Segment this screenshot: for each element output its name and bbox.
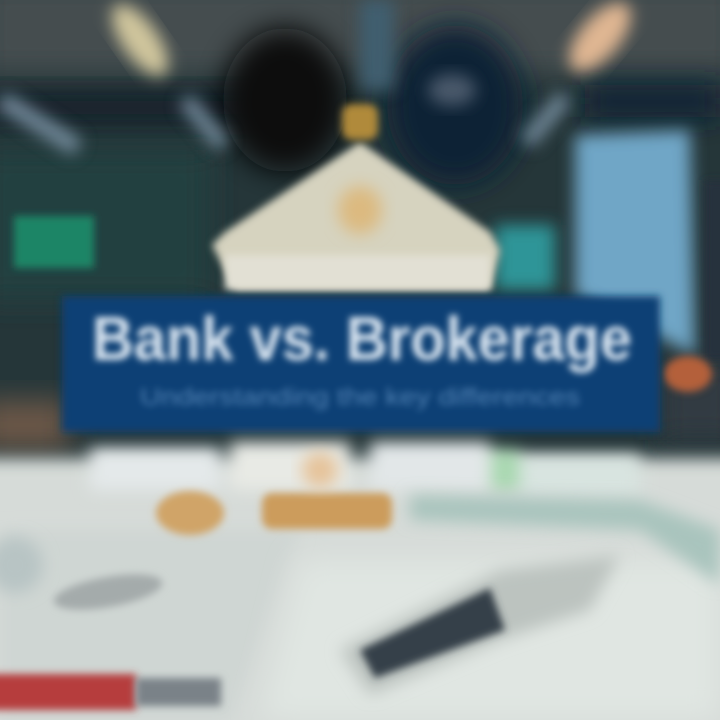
ceiling light: right <box>558 0 642 82</box>
shadow left grey <box>0 537 43 593</box>
orange top accent <box>302 452 338 488</box>
strip of small documents <box>90 442 640 495</box>
red bar: bottom left <box>0 674 136 710</box>
dome highlight <box>428 74 476 106</box>
icon: bank building roof <box>212 104 500 290</box>
green sign <box>14 216 94 268</box>
orange label: right <box>262 493 392 529</box>
window: right side blue <box>575 130 695 355</box>
chart paper: right, green tint <box>410 495 720 585</box>
orange object right of banner <box>664 356 712 392</box>
shadow oval on paper <box>51 568 165 616</box>
dark column at right edge <box>704 180 720 360</box>
ceiling light: left <box>101 0 179 85</box>
desk surface <box>0 458 720 720</box>
subheading: Understanding the key differences <box>140 384 580 411</box>
heading: Bank vs. Brokerage <box>92 305 632 374</box>
teal column <box>495 225 555 290</box>
banner: title panel <box>62 296 660 432</box>
grey bar: bottom left <box>136 678 221 706</box>
ceiling light strips <box>0 0 571 155</box>
ceiling dark domes <box>223 25 720 185</box>
device: dark stapler <box>340 555 620 695</box>
orange blob: left <box>156 491 224 535</box>
